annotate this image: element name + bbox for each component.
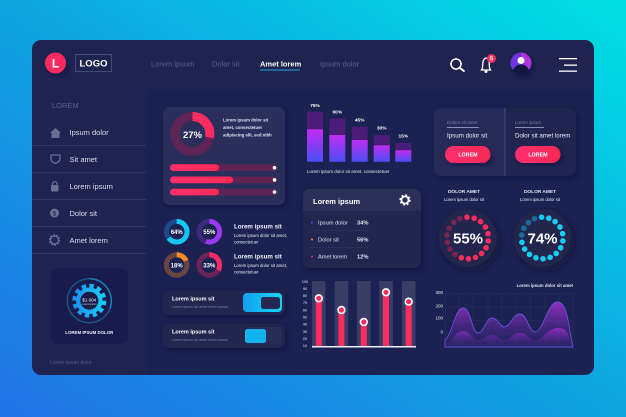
secondary area series [445,328,573,347]
logo box: LOGO [80,58,107,70]
panel: list [303,189,421,268]
icon: search [451,59,464,72]
gauge headings: DOLOR AMET [448,189,480,195]
gear card [50,268,129,344]
y axis labels: 80 [303,294,307,298]
icon: gear [75,286,104,315]
gear card: LOREM IPSUM DOLOR [65,330,114,335]
navigation: Ipsum dolor [320,60,360,68]
donut chart 27%: 27% [183,130,203,141]
donut captions: consectetuer [234,270,259,274]
sidebar menu [32,128,146,254]
gauge 74%: 74% [527,230,558,248]
sidebar [32,101,146,366]
icon: hamburger menu [559,58,577,72]
bar chart: percentages: 60% [332,110,343,116]
description: amet, consectetuer [223,125,262,130]
gauge 55% [439,209,497,267]
donut 64%: 64% [171,230,183,236]
y axis labels [302,280,308,348]
list rows: 56% [357,238,368,244]
list rows: 34% [357,220,368,226]
toggle card 2: Lorem ipsum sit [172,330,215,336]
bar chart: percentages: 45% [355,118,365,124]
y axis labels: 20 [303,337,307,341]
gauge headings: Lorem ipsum dolor sit [444,197,485,202]
list rows: Ipsum dolor [318,220,348,226]
bar chart: percentages: 15% [398,134,409,140]
toggle card 2: Lorem ipsum sit amet lorem ipsum [172,338,228,342]
y axis labels: 200 [435,304,443,308]
progress bars [170,164,277,195]
donut captions: Lorem ipsum sit [234,254,282,260]
logo badge: L [52,56,59,70]
donut captions: Lorem ipsum dolor sit amet, [234,263,287,268]
icon: settings gear [400,195,410,205]
menu item: shield: Sit amet [70,155,98,164]
y axis labels: 60 [303,308,307,312]
header bar [45,52,577,75]
toggle card 2 [163,324,285,348]
bar chart: percentages: Lorem ipsum dolor sit amet, consectetuer [307,169,390,174]
donut 18%: 18% [171,263,183,269]
donut 55%: 55% [203,230,216,236]
y axis labels: 40 [303,323,307,327]
panel: split call to action [434,108,576,176]
icon: notification bell [482,54,496,73]
menu item: home: Ipsum dolor [70,128,109,137]
y axis labels: 10 [303,344,307,348]
list rows: Amet lorem [318,254,347,260]
description: Lorem ipsum dolor sit [223,118,269,122]
menu item: dollar [50,208,98,218]
menu item: dollar: $ [53,212,57,218]
toggle card 1: Lorem ipsum sit amet lorem ipsum [172,305,228,309]
y axis labels: 300 [435,290,443,295]
navigation: Dolor sit [212,60,240,68]
right call to action: LOREM [528,152,548,158]
navigation: Amet lorem [260,60,302,68]
menu item: gear: Amet lorem [70,236,108,245]
donut 33%: 33% [203,263,216,269]
icon: notification bell: 5 [490,56,494,62]
y axis labels: 30 [303,330,307,334]
y axis labels: 0 [440,330,443,334]
list rows: 12% [357,254,368,260]
area chart [435,283,574,347]
y axis labels: 100 [302,280,308,284]
y axis labels: 90 [303,287,307,291]
gear card: Lorem ipsum [82,303,97,306]
toggle on [243,293,282,312]
toggle card 1 [163,291,285,315]
logo box [76,54,112,72]
navigation: Lorem ipsum [151,60,194,68]
left call to action: Ipsum dolor sit [447,132,488,140]
gear progress ring [67,279,111,323]
list rows: Dolor sit [318,238,339,244]
toggle card 1: Lorem ipsum sit [172,296,215,302]
donut captions: Lorem ipsum dolor sit amet, [234,233,287,238]
bar chart: percentages [307,103,411,174]
right call to action: Lorem ipsum [515,120,541,125]
icon: avatar [510,52,532,75]
navigation [151,60,360,70]
gear card: $1 004 [82,298,97,302]
description: adipiscing elit, sed nibh [223,132,272,138]
dashboard window [32,40,594,375]
y axis labels [435,290,443,334]
logo badge [45,52,66,74]
y axis labels: 100 [435,316,443,320]
right call to action: Dolor sit amet lorem [515,132,570,140]
left call to action: LOREM [458,152,478,158]
panel: donut and progress bars [163,107,285,205]
right call to action [515,120,570,163]
y axis labels: 50 [303,316,307,320]
gauge headings: Lorem ipsum dolor sit [520,197,561,202]
bar chart: percentages: 75% [310,103,321,109]
donut captions: Lorem ipsum sit [234,224,282,230]
left call to action: Dolore sit amet [447,120,478,125]
y axis labels: 70 [303,301,307,305]
lollipop bar chart [302,280,416,348]
donut captions: consectetuer [234,240,259,244]
left call to action [445,120,490,163]
menu item: dollar: Dolor sit [70,209,98,218]
main area series [445,302,573,347]
menu item: lock: Lorem ipsum [70,182,113,191]
gauge 55%: 55% [453,230,483,248]
gauge headings [444,189,561,202]
donut captions [234,224,287,274]
gauge headings: DOLOR AMET [524,189,556,195]
toggle off [245,327,282,344]
small donut charts [166,221,220,275]
area chart: Lorem ipsum dolor sit amet [517,283,574,288]
gauge 74% [513,209,571,267]
bar chart: percentages: 30% [377,126,387,132]
sidebar heading: LOREM [52,101,79,110]
list rows [310,220,368,260]
description [223,118,272,138]
panel: list: Lorem ipsum [313,197,360,206]
sidebar footer text: Lorem ipsum dolor [50,360,92,366]
